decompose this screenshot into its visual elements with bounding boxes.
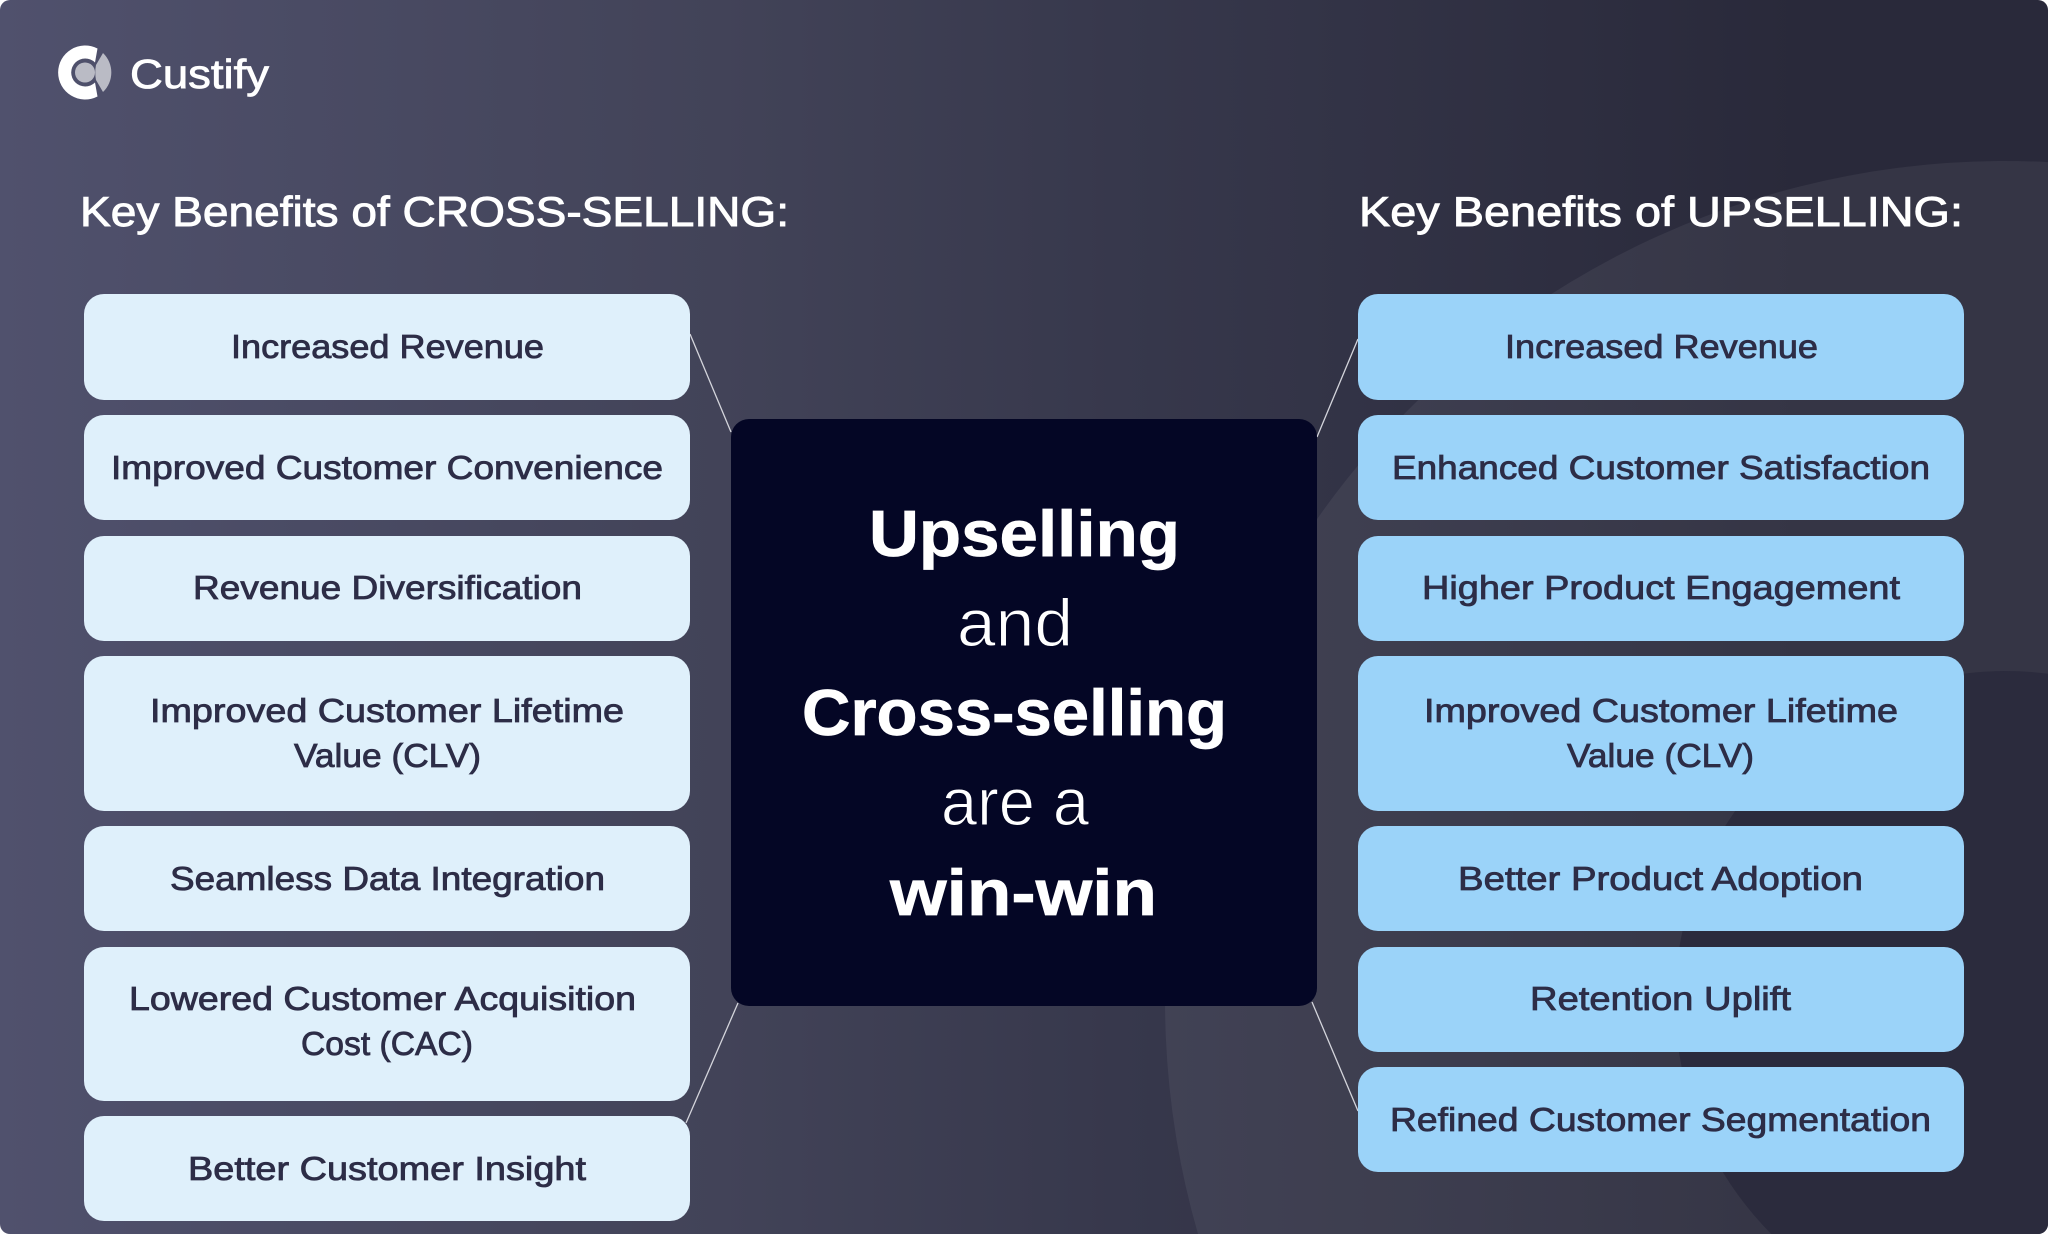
heading: cross-selling: Key Benefits of CROSS-SELLING: (80, 188, 789, 235)
central text: Upselling (869, 497, 1180, 570)
benefit: increased revenue (84, 294, 690, 400)
benefit: improved clv: Value (CLV) (294, 737, 481, 774)
benefit: better product adoption (1358, 826, 1964, 931)
brand name: Custify (130, 51, 270, 97)
benefit: increased revenue: Increased Revenue (1505, 328, 1818, 365)
central text: win-win (889, 856, 1157, 929)
benefit: revenue diversification: Revenue Diversification (193, 569, 582, 606)
central text: are a (941, 765, 1090, 840)
panel: cross-selling benefits (84, 294, 690, 1221)
benefit: improved clv (84, 656, 690, 811)
benefit: better customer insight: Better Customer Insight (188, 1150, 586, 1187)
benefit: lowered cac: Cost (CAC) (301, 1025, 473, 1062)
central text (802, 497, 1227, 929)
benefit: improved clv: Improved Customer Lifetime (1424, 692, 1898, 729)
benefit: increased revenue (1358, 294, 1964, 400)
logo: Custify (58, 46, 270, 100)
benefit: refined customer segmentation: Refined Customer Segmentation (1390, 1101, 1931, 1138)
benefit: lowered cac (84, 947, 690, 1101)
benefit: improved clv: Value (CLV) (1567, 737, 1754, 774)
benefit: refined customer segmentation (1358, 1067, 1964, 1172)
benefit: retention uplift (1358, 947, 1964, 1052)
benefit: retention uplift: Retention Uplift (1530, 980, 1791, 1017)
central text: Cross-selling (802, 676, 1227, 749)
benefit: better product adoption: Better Product Adoption (1458, 860, 1863, 897)
heading: upselling: Key Benefits of UPSELLING: (1359, 188, 1963, 235)
central text: and (957, 586, 1073, 661)
benefit: better customer insight (84, 1116, 690, 1221)
benefit: revenue diversification (84, 536, 690, 641)
icon: logo mark (58, 46, 111, 100)
benefit: enhanced customer satisfaction: Enhanced Customer Satisfaction (1392, 449, 1930, 486)
benefit: improved clv: Improved Customer Lifetime (150, 692, 624, 729)
benefit: improved clv (1358, 656, 1964, 811)
benefit: enhanced customer satisfaction (1358, 415, 1964, 520)
benefit: improved customer convenience: Improved Customer Convenience (111, 449, 663, 486)
benefit: seamless data integration (84, 826, 690, 931)
benefit: higher product engagement (1358, 536, 1964, 641)
benefit: lowered cac: Lowered Customer Acquisition (129, 980, 636, 1017)
benefit: improved customer convenience (84, 415, 690, 520)
panel: upselling benefits (1358, 294, 1964, 1172)
benefit: higher product engagement: Higher Product Engagement (1422, 569, 1900, 606)
connector lines (686, 334, 1358, 1123)
panel: central message (731, 419, 1317, 1006)
benefit: increased revenue: Increased Revenue (231, 328, 544, 365)
benefit: seamless data integration: Seamless Data Integration (170, 860, 605, 897)
